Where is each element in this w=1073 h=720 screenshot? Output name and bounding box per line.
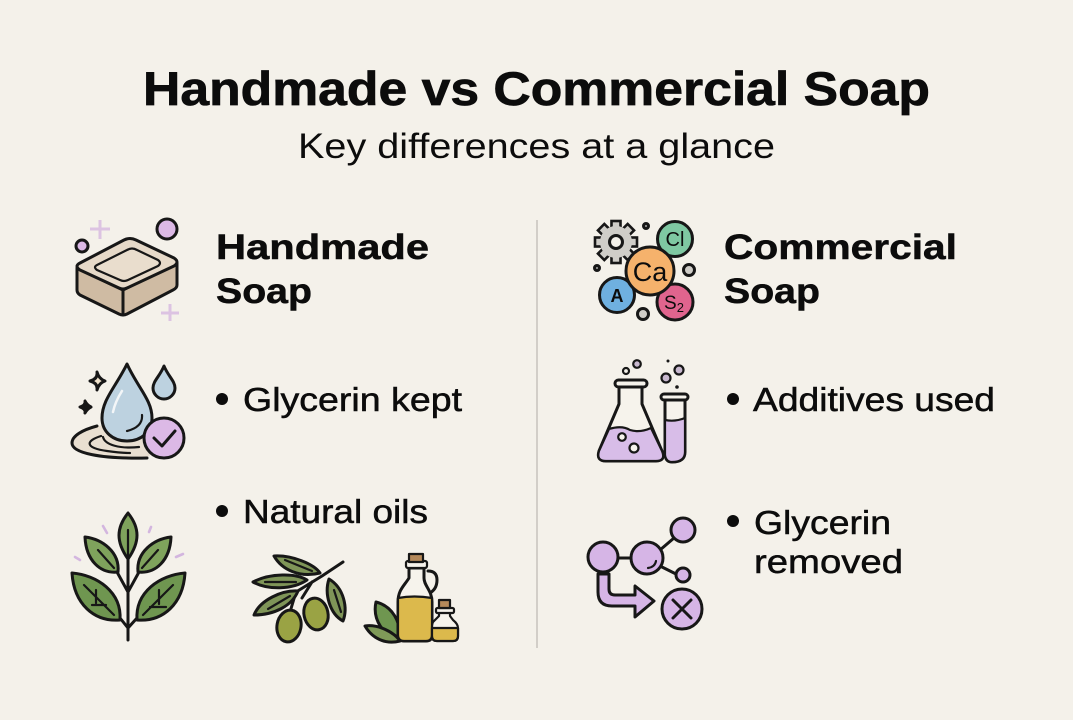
icon: glycerin drops: [72, 364, 184, 458]
icon: chemical elements: Cl: [666, 229, 684, 251]
panel: handmade soap: [72, 219, 462, 644]
bullet: glycerin removed: [727, 504, 903, 580]
bullet: glycerin removed: Glycerin: [754, 504, 891, 541]
icon: chemical elements: S: [664, 293, 677, 314]
panel: handmade soap: Soap: [216, 272, 312, 311]
title: Handmade vs Commercial Soap: [143, 62, 930, 115]
icon: olive branch: [253, 556, 345, 644]
heading: handmade soap: Handmade: [216, 228, 429, 267]
icon: soap bar: [76, 219, 179, 321]
bullet: additives used: Additives used: [753, 381, 995, 418]
panel: commercial soap: Soap: [724, 272, 820, 311]
icon: chemical elements: A: [610, 286, 624, 306]
heading: commercial soap: Commercial: [724, 228, 957, 267]
icon: flask and test tube: [598, 360, 688, 462]
icon: green plant: [72, 513, 185, 640]
bullet: glycerin removed: removed: [754, 543, 903, 580]
icon: chemical elements: [594, 221, 694, 320]
icon: chemical elements: Ca: [633, 257, 668, 287]
icon: oil bottles: [365, 554, 458, 642]
icon: glycerin removal: [588, 518, 702, 629]
panel: commercial soap: [588, 221, 995, 629]
bullet: natural oils: Natural oils: [243, 493, 428, 530]
bullet: glycerin kept: Glycerin kept: [243, 381, 462, 418]
subtitle: Key differences at a glance: [298, 127, 775, 166]
icon: chemical elements: 2: [677, 300, 684, 315]
